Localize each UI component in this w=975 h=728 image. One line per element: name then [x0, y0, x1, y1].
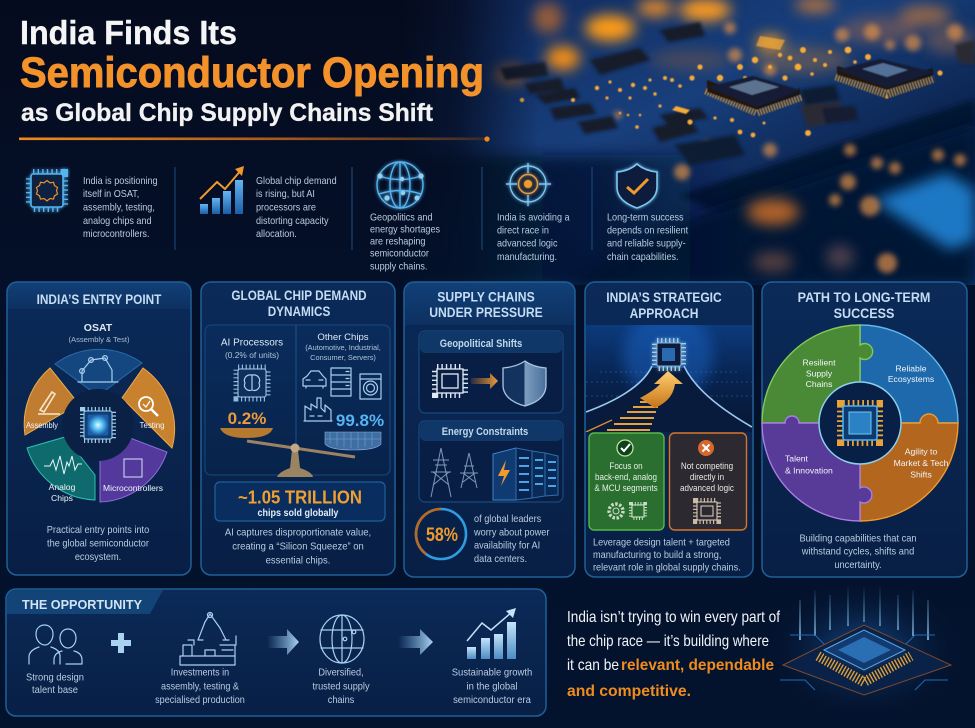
description: manufacturing to build a strong, [593, 550, 721, 561]
icon: cross [698, 440, 714, 456]
puzzle hub [819, 382, 901, 464]
wheel diagram [24, 349, 175, 503]
closing statement: it can be [567, 657, 619, 674]
closing statement: and competitive. [567, 683, 691, 700]
summary 4: text: manufacturing. [497, 252, 557, 263]
puzzle: resilient supply chains [762, 325, 873, 423]
heading: DYNAMICS [268, 303, 331, 319]
summary 3: text: Geopolitics and [370, 212, 432, 224]
summary 2: chart icon [200, 166, 244, 214]
summary 3: text: are reshaping [370, 236, 425, 248]
box: not competing [670, 433, 746, 530]
summary 4: target icon [506, 163, 551, 206]
title block [20, 14, 484, 127]
icon: chip at horizon [657, 343, 681, 366]
title line 2: Semiconductor Opening [20, 49, 484, 97]
icon: growth chart [467, 608, 516, 659]
caption 2: assembly, testing & [161, 681, 239, 693]
caption: chips sold globally [258, 508, 339, 519]
segment: assembly [24, 368, 74, 435]
icon: globe [320, 615, 364, 663]
description: data centers. [474, 554, 527, 565]
value: ~1.05 TRILLION [238, 488, 362, 508]
panel: path to long-term success [762, 282, 967, 577]
caption 3: trusted supply [312, 681, 370, 693]
icon: shield [503, 361, 546, 406]
segment: analog chips [27, 437, 95, 503]
closing statement: the chip race — it’s building where [567, 633, 769, 650]
title rule [19, 136, 490, 142]
heading: PATH TO LONG-TERM [798, 289, 930, 305]
geopolitical shifts box [419, 331, 563, 413]
puzzle: agility [860, 414, 958, 521]
AI processors label: (0.2% of units) [225, 350, 279, 360]
text: directly in [690, 472, 724, 482]
summary 3: text: energy shortages [370, 224, 440, 236]
caption 4: Sustainable growth [452, 667, 532, 679]
description: Practical entry points into [47, 525, 149, 536]
summary 2: text: is rising, but AI [256, 189, 315, 200]
icon: check [617, 440, 633, 456]
puzzle: talent and innovation [762, 416, 872, 521]
label: Energy Constraints [442, 426, 529, 438]
arrow 1 [267, 629, 299, 655]
58% donut [416, 509, 466, 559]
text: Focus on [609, 461, 643, 471]
icon: car [303, 371, 326, 388]
label: Shifts [910, 470, 932, 480]
icon: washer [360, 374, 381, 399]
description: AI captures disproportionate value, [225, 527, 371, 539]
caption 1: talent base [32, 685, 78, 696]
summary 1: text: itself in OSAT, [83, 189, 139, 200]
heading: SUPPLY CHAINS [437, 289, 535, 305]
summary 2: text: Global chip demand [256, 176, 337, 187]
heading: INDIA’S ENTRY POINT [37, 291, 161, 307]
title line 1: India Finds Its [20, 14, 237, 51]
box: focus [589, 433, 664, 530]
panel: global chip demand dynamics [201, 282, 395, 575]
description: withstand cycles, shifts and [801, 546, 914, 558]
text: & MCU segments [594, 483, 658, 493]
background photo: circuit board with bokeh lights [400, 0, 975, 285]
panel: India's strategic approach [585, 282, 753, 577]
panel: supply chains under pressure [404, 282, 575, 577]
road illustration [586, 325, 752, 432]
label: Ecosystems [888, 374, 934, 384]
summary strip [31, 162, 688, 273]
balance scale [220, 428, 381, 477]
title line 3: as Global Chip Supply Chains Shift [21, 99, 434, 127]
other chips label: Other Chips [317, 332, 369, 343]
caption 2: specialised production [155, 695, 245, 706]
label: Assembly [26, 420, 59, 430]
text: Not competing [681, 461, 733, 471]
text: back-end, analog [595, 472, 657, 482]
summary 1: chip icon [31, 174, 63, 207]
description: the global semiconductor [47, 538, 150, 550]
summary 1: text: India is positioning [83, 176, 158, 187]
summary 5: text: and reliable supply- [607, 238, 686, 250]
icon: robot factory [180, 612, 236, 665]
OSAT label: OSAT [84, 322, 113, 334]
description: essential chips. [266, 555, 330, 567]
heading: UNDER PRESSURE [429, 304, 543, 320]
icon: server rack [493, 448, 558, 500]
caption 3: chains [328, 695, 354, 706]
icon: factory [304, 398, 332, 421]
label: Geopolitical Shifts [440, 338, 523, 350]
caption 4: semiconductor era [453, 695, 531, 706]
summary 1: text: microcontrollers. [83, 229, 149, 240]
text: advanced logic [680, 483, 735, 493]
icon: chip [437, 369, 463, 393]
heading: APPROACH [630, 305, 698, 321]
summary 3: text: semiconductor [370, 248, 430, 260]
segment: OSAT [55, 349, 142, 396]
label: Analog [49, 482, 75, 492]
summary 4: text: India is avoiding a [497, 212, 570, 224]
caption 3: Diversified, [318, 667, 364, 679]
caption 2: Investments in [171, 667, 229, 679]
closing statement: relevant, dependable [621, 657, 774, 674]
other chips label: (Automotive, Industrial, [305, 343, 381, 352]
AI share value: 0.2% [228, 409, 266, 428]
arrow [471, 373, 498, 389]
OSAT sublabel: (Assembly & Test) [68, 335, 130, 344]
label: Agility to [905, 446, 937, 456]
summary 2: text: allocation. [256, 229, 297, 240]
heading: INDIA’S STRATEGIC [606, 289, 722, 305]
summary 5: text: chain capabilities. [607, 252, 679, 263]
icon: server [331, 368, 351, 396]
description: of global leaders [474, 514, 541, 525]
summary 2: text: distorting capacity [256, 216, 329, 227]
description: creating a “Silicon Squeeze” on [232, 541, 364, 553]
energy constraints box [419, 421, 563, 502]
summary 5: shield icon [617, 164, 657, 208]
value: 58% [426, 525, 458, 546]
arrow 2 [398, 629, 433, 655]
description: uncertainty. [834, 560, 882, 571]
label: Talent [785, 454, 808, 464]
summary 1: text: assembly, testing, [83, 202, 155, 214]
segment: microcontrollers [100, 438, 167, 502]
summary 5: text: depends on resilient [607, 225, 688, 237]
label: Reliable [895, 364, 927, 374]
description: Leverage design talent + targeted [593, 537, 730, 549]
description: worry about power [473, 527, 550, 539]
tab: heading [7, 590, 163, 614]
heading: GLOBAL CHIP DEMAND [231, 287, 367, 303]
description: relevant role in global supply chains. [593, 562, 741, 574]
AI processors label: AI Processors [221, 338, 283, 348]
description: Building capabilities that can [799, 533, 917, 545]
description: ecosystem. [75, 552, 121, 563]
label: Microcontrollers [103, 483, 163, 493]
label: Testing [140, 420, 165, 430]
icon: gear and chip [609, 504, 644, 518]
description: availability for AI [474, 540, 540, 552]
other chips label: Consumer, Servers) [310, 353, 376, 362]
board chip 2 [836, 59, 934, 94]
plus sign [111, 633, 131, 653]
label: & Innovation [785, 466, 833, 476]
icon: chip [697, 502, 717, 520]
wheel hub [62, 389, 134, 461]
label: Chips [51, 493, 73, 503]
closing statement: India isn’t trying to win every part of [567, 609, 780, 626]
caption 4: in the global [466, 681, 518, 693]
other share value: 99.8% [336, 411, 384, 430]
heading: SUCCESS [834, 305, 895, 321]
AI chip icon [238, 369, 266, 397]
comparison box [205, 325, 390, 477]
summary 2: text: processors are [256, 202, 316, 214]
summary 1: text: analog chips and [83, 216, 152, 227]
label: Supply [806, 368, 833, 378]
puzzle diagram [762, 325, 958, 521]
total chips callout [215, 482, 385, 521]
tab: heading: THE OPPORTUNITY [22, 597, 142, 612]
summary 4: text: advanced logic [497, 238, 558, 250]
label: Chains [806, 379, 832, 389]
board chip 1 [706, 76, 802, 112]
label: Market & Tech [894, 458, 949, 468]
caption 1: Strong design [26, 672, 84, 684]
summary 5: text: Long-term success [607, 212, 684, 224]
icon: power towers [431, 448, 478, 497]
closing statement [567, 609, 780, 700]
puzzle: reliable ecosystems [860, 325, 958, 423]
panel: the opportunity [6, 589, 546, 716]
summary 4: text: direct race in [497, 225, 549, 237]
summary 3: text: supply chains. [370, 261, 427, 273]
label: Resilient [803, 358, 835, 368]
closing chip illustration [759, 578, 969, 722]
icon: people [29, 625, 82, 664]
panel: India's entry point [7, 282, 191, 575]
segment: testing [122, 368, 175, 448]
summary 3: globe icon [377, 162, 424, 208]
